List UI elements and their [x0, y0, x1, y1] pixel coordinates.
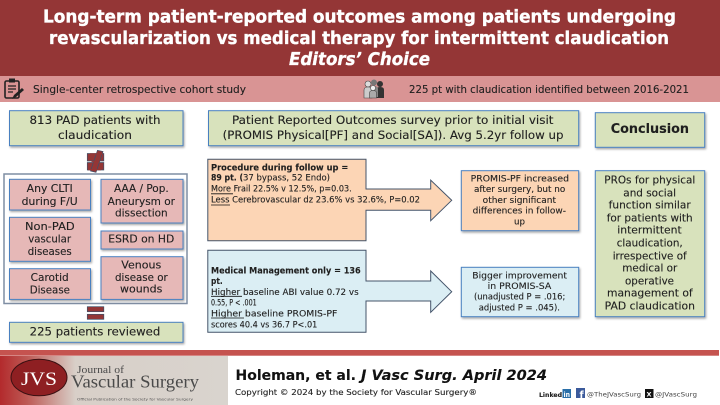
arrow panel: medical management only: pt. — [211, 277, 223, 287]
title banner: revascularization vs medical therapy for intermittent claudication — [49, 28, 669, 49]
result: surgery outcome: other significant — [483, 196, 557, 206]
exclusion: non-PAD: diseases — [28, 246, 72, 258]
LinkedIn logo — [539, 389, 571, 399]
X logo: X — [646, 390, 652, 398]
box: 813 PAD patients: 813 PAD patients with — [30, 113, 160, 127]
X logo — [645, 389, 654, 398]
exclusion: carotid: Carotid — [31, 272, 69, 284]
panel: conclusion text: management of — [607, 288, 693, 300]
exclusion: carotid — [10, 269, 90, 299]
study design text: Single-center retrospective cohort study — [33, 84, 246, 96]
exclusion: non-PAD: vascular — [28, 234, 72, 246]
box: 813 PAD patients — [10, 111, 183, 146]
Facebook logo — [576, 388, 585, 401]
exclusion: AAA — [101, 179, 183, 223]
box: 225 patients reviewed: 225 patients reviewed — [30, 325, 160, 339]
arrow panel: medical management only: 0.55, P < .001 — [211, 298, 257, 308]
result: surgery outcome: up — [514, 218, 525, 228]
icon: equals sign — [87, 307, 104, 319]
panel: conclusion text: medical or — [622, 263, 678, 275]
exclusion: AAA: AAA / Pop. — [114, 183, 169, 195]
arrow panel: medical management only: Medical Management only = 136 — [211, 266, 361, 276]
exclusion: non-PAD — [10, 217, 90, 261]
arrow panel: procedure during follow up: More Frail 22.5% v 12.5%, p=0.03. — [211, 185, 352, 195]
box: 225 patients reviewed — [10, 322, 183, 342]
result: medical management outcome: Bigger improvement — [472, 272, 568, 282]
Facebook handle: @TheJVascSurg — [587, 390, 641, 398]
result: medical management outcome: in PROMIS-SA — [488, 282, 551, 292]
exclusion: venous: disease or — [115, 272, 168, 284]
icon: clipboard and pencil — [5, 78, 24, 99]
panel: conclusion text: and social — [623, 188, 676, 200]
result: surgery outcome — [461, 171, 579, 231]
box: PROMIS survey: Patient Reported Outcomes survey prior to initial visit — [232, 113, 554, 127]
social media links — [539, 388, 697, 401]
exclusion: ESRD: ESRD on HD — [108, 234, 174, 246]
box: PROMIS survey: (PROMIS Physical[PF] and Social[SA]). Avg 5.2yr follow up — [223, 128, 563, 142]
exclusion: any CLTI — [10, 179, 90, 210]
panel: conclusion text: intermittent — [617, 225, 682, 237]
arrow panel: medical management only — [208, 250, 452, 332]
exclusion: any CLTI: during F/U — [22, 196, 78, 208]
study info band — [0, 76, 720, 102]
icon: group of people — [364, 80, 384, 98]
arrow panel: procedure during follow up: Less Cerebrovascular dz 23.6% vs 32.6%, P=0.02 — [211, 196, 420, 206]
citation: J Vasc Surg. April 2024 — [358, 368, 547, 384]
journal logo — [0, 356, 228, 405]
box: 813 PAD patients: claudication — [58, 128, 132, 142]
title banner: Long-term patient-reported outcomes among patients undergoing — [43, 6, 676, 28]
exclusion: any CLTI: Any CLTI — [27, 183, 73, 195]
panel: conclusion text: for patients with — [607, 212, 693, 224]
arrow panel: medical management only: scores 40.4 vs 36.7 P<.01 — [211, 320, 317, 330]
box: PROMIS survey — [208, 111, 579, 146]
arrow panel: procedure during follow up: 89 pt. ( — [211, 174, 243, 184]
panel: conclusion text: PAD claudication — [605, 300, 695, 312]
result: medical management outcome: adjusted P = .045). — [479, 303, 560, 313]
exclusion: venous: wounds — [120, 284, 162, 296]
panel: conclusion text: irrespective of — [613, 250, 687, 262]
LinkedIn logo: Linked — [539, 391, 562, 399]
title banner — [0, 0, 720, 76]
heading: conclusion — [595, 113, 705, 147]
result: surgery outcome: PROMIS-PF increased — [471, 175, 569, 185]
result: medical management outcome: (unadjusted P = .016; — [474, 293, 565, 303]
panel: exclusion criteria — [4, 174, 187, 304]
exclusion: carotid: Disease — [30, 285, 70, 297]
footer divider bar — [0, 350, 719, 356]
LinkedIn logo: in — [564, 391, 570, 399]
journal logo: JVS — [21, 370, 57, 390]
arrow panel: medical management only: Higher baseline PROMIS-PF — [211, 310, 337, 320]
exclusion: non-PAD: Non-PAD — [25, 221, 75, 233]
panel: conclusion text: PROs for physical — [604, 175, 695, 187]
copyright: Copyright © 2024 by the Society for Vascular Surgery® — [235, 387, 477, 397]
exclusion: venous — [101, 257, 183, 299]
arrow panel: procedure during follow up: 37 bypass, 52 Endo) — [243, 174, 330, 184]
exclusion: AAA: dissection — [115, 208, 168, 220]
result: surgery outcome: differences in follow- — [473, 207, 566, 217]
icon: not equal sign — [87, 150, 104, 172]
result: medical management outcome — [461, 267, 579, 317]
exclusion: AAA: Aneurysm or — [108, 196, 176, 208]
journal logo: Official Publication of the Society for Vascular Surgery — [77, 397, 194, 402]
exclusion: ESRD — [101, 231, 183, 249]
panel: conclusion text: claudication, — [617, 238, 683, 250]
Facebook logo: f — [580, 390, 584, 401]
arrow panel: procedure during follow up — [208, 159, 452, 241]
heading: conclusion: Conclusion — [611, 122, 689, 137]
arrow panel: medical management only: Higher baseline ABI value 0.72 vs — [211, 288, 359, 298]
panel: conclusion text — [595, 171, 705, 317]
panel: conclusion text: operative — [625, 275, 674, 287]
citation: Holeman, et al. — [236, 368, 356, 384]
title banner: Editors’ Choice — [289, 49, 430, 70]
X handle: @JVascSurg — [655, 390, 697, 398]
cohort text: 225 pt with claudication identified between 2016-2021 — [409, 84, 689, 96]
journal logo: Journal of — [77, 365, 125, 376]
journal logo: Vascular Surgery — [71, 372, 199, 392]
arrow panel: procedure during follow up: Procedure during follow up = — [211, 164, 348, 174]
exclusion: venous: Venous — [121, 259, 161, 271]
result: surgery outcome: after surgery, but no — [474, 185, 565, 195]
panel: conclusion text: function similar — [609, 200, 691, 212]
citation — [236, 368, 547, 384]
